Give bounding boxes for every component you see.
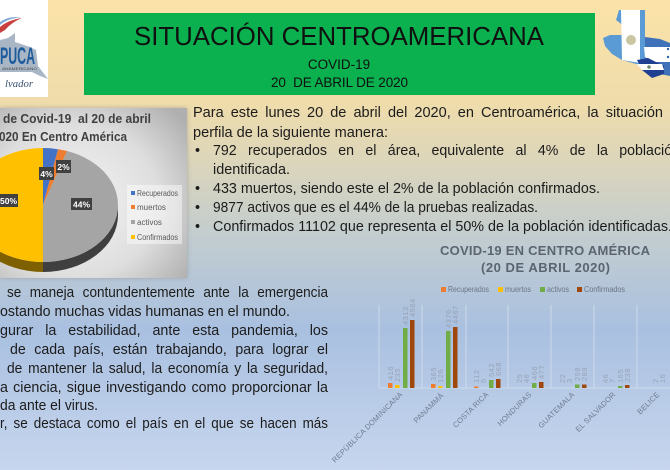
- text block: context paragraph: a ciencia, sigue investigando como proporcionar la: [0, 380, 328, 396]
- header banner: [84, 13, 595, 95]
- data label 2%: 2%: [57, 162, 70, 172]
- text block: situation summary: •: [195, 143, 200, 159]
- chart value labels: 46: [522, 374, 531, 383]
- pie legend: muertos: [137, 203, 166, 212]
- chart value labels: 235: [393, 368, 402, 382]
- chart value labels: 298: [573, 367, 582, 381]
- data label 44%: [71, 198, 92, 210]
- chart category labels: REPÚBLICA DOMINICANA: [330, 390, 404, 464]
- chart value labels: 165: [616, 369, 625, 383]
- chart value labels: 16: [658, 374, 667, 383]
- chart category labels: EL SALVADOR: [574, 390, 618, 434]
- pie legend: [127, 185, 182, 244]
- pie legend: activos: [137, 218, 162, 227]
- chart legend: activos: [547, 285, 569, 294]
- chart value labels: 112: [472, 370, 481, 383]
- chart category labels: GUATEMALA: [536, 390, 576, 430]
- chart bars: [388, 320, 630, 388]
- pie legend: Recuperados: [137, 189, 178, 198]
- logo: lvador: [5, 78, 34, 90]
- chart title: (20 DE ABRIL 2020): [481, 260, 610, 275]
- text block: situation summary: 433 muertos, siendo este el 2% de la población confirmados.: [213, 181, 600, 197]
- chart value labels: 542: [487, 363, 496, 377]
- chart gridlines: [379, 305, 670, 388]
- logo: ANAMERICANO: [2, 67, 37, 71]
- date: 20 DE ABRIL DE 2020: [271, 75, 408, 90]
- data label 44%: 44%: [73, 200, 90, 210]
- text block: context paragraph: ostando muchas vidas humanas en el mundo.: [0, 304, 290, 320]
- chart value labels: 4467: [451, 305, 460, 324]
- data label 50%: 50%: [0, 196, 17, 206]
- chart value labels: 668: [494, 362, 503, 376]
- chart title: COVID-19 EN CENTRO AMÉRICA: [440, 243, 651, 258]
- text block: context paragraph: de cada país, están trabajando, para lograr el: [10, 342, 328, 358]
- chart value labels: 126: [436, 369, 445, 383]
- text block: situation summary: •: [195, 181, 200, 197]
- chart value labels: 238: [623, 368, 632, 382]
- chart value labels: 4313: [401, 306, 410, 325]
- panel: pie chart: [0, 108, 187, 278]
- chart value labels: 289: [580, 367, 589, 381]
- pie legend: Confirmados: [137, 233, 178, 242]
- logo: [0, 0, 48, 97]
- text block: situation summary: identificada.: [213, 162, 290, 178]
- pie chart title: de Covid-19 al 20 de abril: [3, 111, 151, 126]
- icon: Central America flag map: [603, 10, 670, 78]
- chart legend: Confirmados: [584, 285, 625, 294]
- chart value labels: 46: [601, 374, 610, 383]
- text block: context paragraph: r, se destaca como el país en el que se hacen más: [0, 416, 328, 432]
- chart value labels: 4964: [408, 298, 417, 317]
- pie chart: [0, 148, 118, 272]
- chart legend: Recuperados: [448, 285, 489, 294]
- bar chart: [330, 243, 670, 464]
- text block: situation summary: [193, 105, 670, 235]
- text block: situation summary: Para este lunes 20 de abril del 2020, en Centroamérica, la situación: [193, 105, 663, 121]
- data label 4%: 4%: [40, 169, 53, 179]
- text block: context paragraph: da ante el virus.: [0, 398, 98, 414]
- chart value labels: 3: [565, 378, 574, 383]
- text block: context paragraph: se maneja contundentemente ante la emergencia: [7, 285, 328, 301]
- chart legend: muertos: [505, 285, 531, 294]
- data label 2%: [56, 160, 71, 173]
- chart category labels: HONDURAS: [496, 390, 533, 428]
- chart category labels: PANAMMÁ: [412, 391, 445, 425]
- pie chart title: [0, 111, 151, 144]
- chart value labels: 22: [558, 374, 567, 383]
- chart value labels: 7: [608, 378, 617, 383]
- data label 4%: [39, 167, 54, 180]
- text block: situation summary: •: [195, 219, 200, 235]
- chart value labels: 4376: [444, 309, 453, 328]
- chart value labels: 466: [530, 366, 539, 380]
- chart title: [440, 243, 651, 275]
- chart value labels: [386, 298, 667, 383]
- chart category labels: [330, 390, 661, 464]
- text block: context paragraph: de mantener la salud, la economía y la seguridad,: [7, 361, 328, 377]
- chart value labels: 365: [429, 367, 438, 381]
- text block: context paragraph: [0, 285, 328, 432]
- title: SITUACIÓN CENTROAMERICANA: [134, 21, 545, 51]
- text block: situation summary: perfila de la siguiente manera:: [193, 125, 388, 141]
- chart value labels: 416: [386, 366, 395, 380]
- chart legend: [441, 285, 625, 294]
- text block: situation summary: •: [195, 200, 200, 216]
- chart value labels: 6: [479, 378, 488, 383]
- pie chart title: 020 En Centro América: [0, 129, 128, 144]
- chart category labels: COSTA RICA: [451, 390, 490, 430]
- chart value labels: 25: [515, 374, 524, 383]
- text block: context paragraph: gurar la estabilidad, ante esta pandemia, los: [0, 323, 328, 339]
- text block: situation summary: Confirmados 11102 que representa el 50% de la población identificadas.: [213, 219, 670, 235]
- chart value labels: 477: [537, 365, 546, 379]
- chart category labels: BELICE: [635, 390, 661, 416]
- chart value labels: 2: [651, 378, 660, 383]
- text block: situation summary: 9877 activos que es el 44% de la pruebas realizadas.: [213, 200, 538, 216]
- logo: PUCA: [0, 43, 35, 70]
- subtitle: COVID-19: [308, 57, 370, 72]
